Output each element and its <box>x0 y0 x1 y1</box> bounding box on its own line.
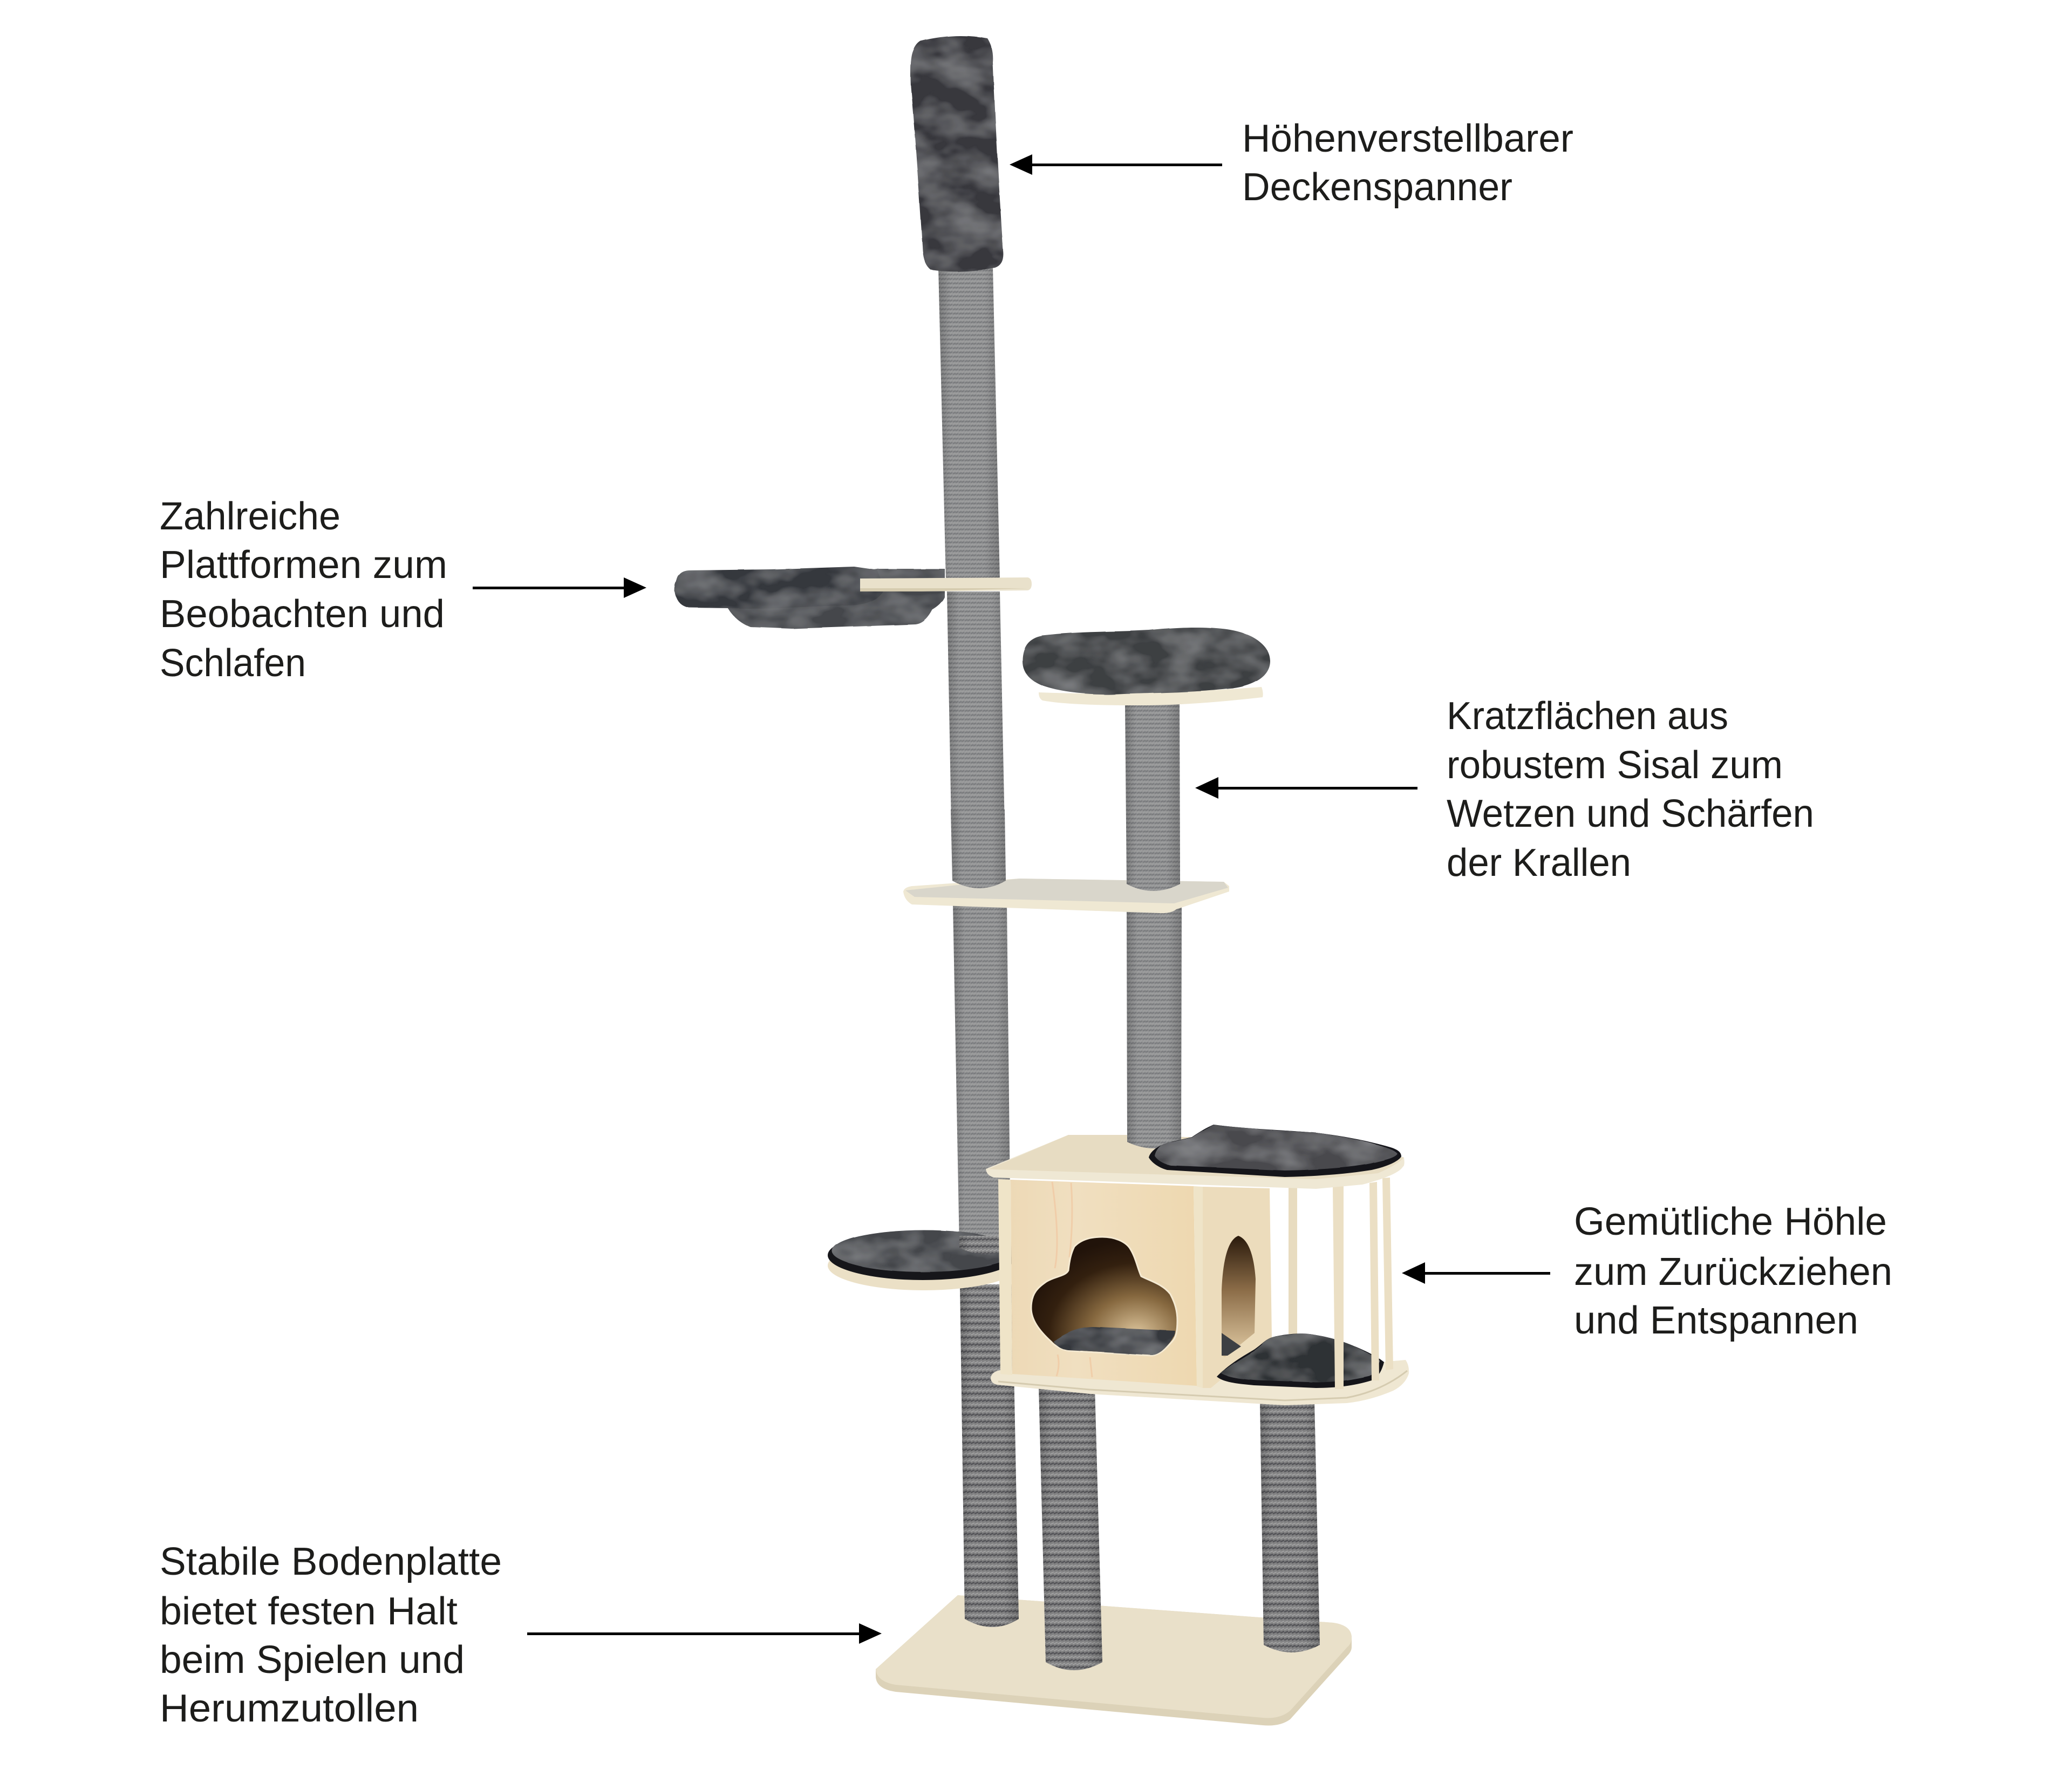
text: Gemütliche Höhle: Gemütliche Höhle <box>1574 1200 1887 1243</box>
cave floor board <box>991 1360 1409 1405</box>
hanging plush bed <box>674 567 945 629</box>
text: Kratzflächen <box>1447 695 1814 884</box>
cat tree product <box>674 36 1409 1726</box>
arrow: to base board <box>527 1623 882 1644</box>
arch opening <box>1222 1236 1256 1357</box>
sisal post: front lower <box>1039 1387 1102 1670</box>
text: Zahlreiche Plattformen: Plattformen zum <box>160 543 447 587</box>
text: Höhenverstellbarer Deckenspanner <box>1242 117 1573 209</box>
sisal post base on top board <box>1127 1131 1181 1148</box>
text: Stabile Bodenplatte: bietet festen Halt <box>160 1590 458 1633</box>
base board <box>876 1595 1352 1726</box>
back bars <box>1289 1187 1297 1334</box>
cushion inside cave <box>1053 1327 1175 1355</box>
text: Stabile Bodenplatte: beim Spielen und <box>160 1638 465 1682</box>
top wooden board <box>986 1135 1405 1189</box>
height-adjustable ceiling tensioner <box>910 36 1003 271</box>
sisal post: right lower <box>1260 1400 1320 1652</box>
top cushion <box>1149 1125 1401 1177</box>
arrow: to ceiling tensioner <box>1010 154 1222 175</box>
bars <box>1333 1178 1393 1389</box>
cave with bars <box>986 1125 1409 1405</box>
text: Kratzflächen: Kratzflächen aus <box>1447 695 1728 738</box>
arrow: to platforms <box>473 577 646 598</box>
front wooden panel <box>1011 1180 1197 1386</box>
round plank under donut bed <box>1039 687 1263 705</box>
text: Kratzflächen: Wetzen und Schärfen <box>1447 792 1814 835</box>
text: Zahlreiche Plattformen: Zahlreiche <box>160 495 340 538</box>
disk cushion <box>832 1230 1015 1272</box>
front panel side strips <box>998 1179 1203 1388</box>
donut plush bed <box>1023 628 1270 695</box>
text: Gemütliche Höhle: und Entspannen <box>1574 1299 1858 1342</box>
text: Kratzflächen: robustem Sisal zum <box>1447 744 1783 787</box>
clover-shaped entrance <box>1031 1237 1177 1356</box>
text: Zahlreiche Plattformen: Beobachten und <box>160 593 445 636</box>
round disk platform <box>828 1230 1020 1290</box>
arrow: to sisal scratching surface <box>1195 777 1417 799</box>
upper wood shelf <box>860 577 1032 591</box>
sisal pole: main, lowest section <box>960 1284 1019 1627</box>
text: Zahlreiche Plattformen: Schlafen <box>160 642 306 685</box>
text: Zahlreiche Plattformen <box>160 495 447 685</box>
text: Stabile Bodenplatte: Stabile Bodenplatte <box>160 1540 502 1583</box>
text: Gemütliche Höhle: zum Zurückziehen <box>1574 1250 1892 1294</box>
sisal pole: main, middle section <box>953 904 1011 1254</box>
bed roll <box>674 567 885 609</box>
text: Höhenverstellbarer Deckenspanner: Höhenverstellbarer <box>1242 117 1573 160</box>
text: Höhenverstellbarer Deckenspanner: Deckenspanner <box>1242 166 1512 209</box>
arrow: to cave <box>1402 1262 1550 1284</box>
sisal pole overlapping middle platform <box>951 809 1006 888</box>
middle wood platform <box>903 879 1229 913</box>
sisal pole: main, top section <box>938 267 1000 580</box>
text: Stabile Bodenplatte: Herumzutollen <box>160 1687 419 1730</box>
sisal post: second, lower section <box>1127 907 1182 1148</box>
hammock underside <box>726 569 945 629</box>
text: Gemütliche Höhle <box>1574 1200 1892 1342</box>
text: Kratzflächen: der Krallen <box>1447 841 1631 884</box>
sisal post: second, upper section <box>1125 702 1180 891</box>
side panel with arch <box>1203 1187 1272 1388</box>
sisal pole: main, second section <box>947 591 1006 888</box>
text: Stabile Bodenplatte <box>160 1540 502 1730</box>
lower right cushion <box>1217 1333 1384 1388</box>
